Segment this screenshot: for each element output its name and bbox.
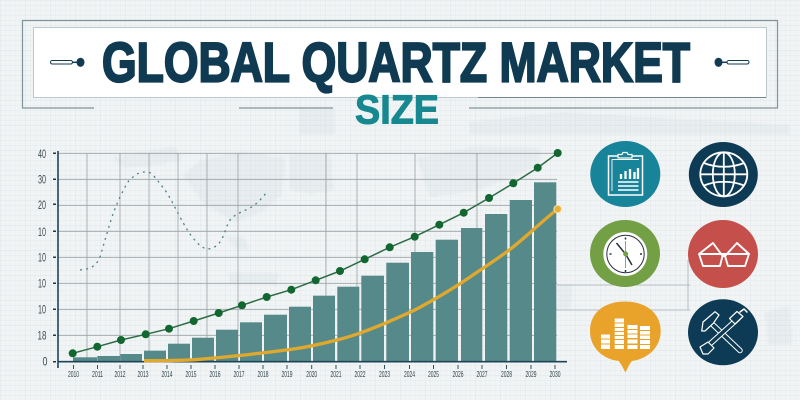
yellow curve <box>144 209 558 361</box>
y axis labels: 10 <box>38 227 46 239</box>
y axis labels: 18 <box>38 330 46 342</box>
axes <box>58 151 567 368</box>
icon: globe <box>689 142 758 207</box>
icon: clipboard report <box>590 141 660 207</box>
x axis labels: 2015 <box>186 369 197 379</box>
x axis labels: 2017 <box>234 369 245 379</box>
icon: glasses <box>688 220 758 288</box>
left ornament <box>50 58 84 67</box>
x axis labels: 2020 <box>306 369 317 379</box>
grid lines <box>58 153 557 361</box>
banner frame <box>22 20 778 108</box>
icon: equalizer speech bubble <box>590 302 661 372</box>
x axis labels: 2028 <box>501 369 512 379</box>
y axis labels: 10 <box>38 278 46 290</box>
y axis labels: 20 <box>38 200 46 212</box>
y axis ticks <box>53 153 56 362</box>
x axis labels: 2013 <box>138 369 149 379</box>
x axis labels: 2022 <box>354 369 366 379</box>
x axis labels: 2030 <box>550 369 561 379</box>
icon: compass clock <box>590 220 660 287</box>
y axis labels: 40 <box>38 149 46 161</box>
dotted curve <box>80 172 267 270</box>
x axis labels: 2024 <box>404 369 415 379</box>
x axis ticks <box>74 365 555 369</box>
x axis labels: 2019 <box>282 369 293 379</box>
x axis labels: 2021 <box>330 369 342 379</box>
y axis labels: 30 <box>38 174 46 186</box>
right ornament <box>714 58 749 67</box>
x axis labels: 2011 <box>92 369 103 379</box>
x axis labels: 2025 <box>428 369 439 379</box>
green line <box>69 149 562 357</box>
subtitle: SIZE <box>355 86 439 132</box>
x axis labels: 2014 <box>162 369 173 379</box>
x axis labels <box>68 369 561 379</box>
y axis labels: 10 <box>38 304 46 316</box>
x axis labels: 2010 <box>68 369 79 379</box>
x axis labels: 2026 <box>452 369 464 379</box>
background world map stipple <box>112 108 792 345</box>
chart <box>38 149 690 379</box>
y axis labels: 10 <box>38 252 46 264</box>
x axis labels: 2012 <box>114 369 126 379</box>
bars <box>73 182 556 362</box>
icon: crossed tools <box>688 299 758 365</box>
y axis labels <box>38 149 48 368</box>
x axis labels: 2029 <box>526 369 537 379</box>
title banner <box>22 20 778 132</box>
y axis labels: 0 <box>42 356 48 368</box>
x axis labels: 2023 <box>379 369 390 379</box>
x axis labels: 2016 <box>210 369 221 379</box>
x axis labels: 2027 <box>476 369 488 379</box>
x axis labels: 2018 <box>258 369 269 379</box>
